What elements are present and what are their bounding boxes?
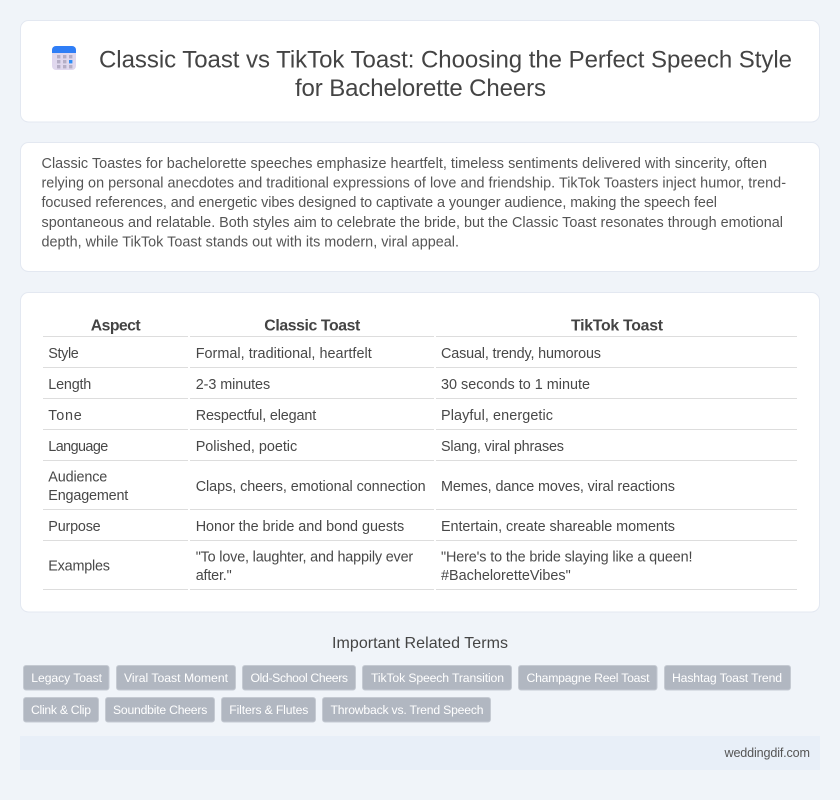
tag xyxy=(242,666,356,690)
row: audience engagement: Claps, cheers, emotional connection xyxy=(196,479,426,495)
tag: Legacy Toast xyxy=(31,671,103,685)
tag: Filters & Flutes xyxy=(229,703,308,717)
row: examples xyxy=(48,550,693,584)
row: examples: #BacheloretteVibes" xyxy=(441,568,571,584)
tag: Clink & Clip xyxy=(31,703,91,717)
header panel xyxy=(20,20,820,122)
title: Classic Toast vs TikTok Toast: Choosing the Perfect Speech Style xyxy=(99,46,792,74)
row: length: 2-3 minutes xyxy=(196,377,270,393)
tag xyxy=(222,698,316,722)
tag xyxy=(116,666,236,690)
row: style: Casual, trendy, humorous xyxy=(441,346,601,362)
tag: Viral Toast Moment xyxy=(124,671,229,685)
row: language: Language xyxy=(48,439,108,455)
panel: description xyxy=(20,142,820,272)
row: examples: "To love, laughter, and happily ever xyxy=(196,550,413,566)
row: purpose xyxy=(48,519,675,535)
tag: Soundbite Cheers xyxy=(113,703,207,717)
tag xyxy=(24,698,98,722)
table header: Classic Toast xyxy=(264,318,361,335)
tag xyxy=(322,698,490,722)
description text: depth, while TikTok Toast stands out with its modern, viral appeal. xyxy=(42,234,459,250)
description text: relying on personal anecdotes and traditional expressions of love and friendship. TikTok Toasters inject humor, trend- xyxy=(42,176,786,192)
description text: focused references, and energetic vibes designed to captivate a younger audience, making the speech feel xyxy=(42,195,717,211)
row: audience engagement: Audience xyxy=(48,470,107,486)
tag xyxy=(664,666,790,690)
tag: Hashtag Toast Trend xyxy=(672,671,782,685)
row: purpose: Entertain, create shareable moments xyxy=(441,519,675,535)
row: tone: Playful, energetic xyxy=(441,408,553,424)
tag: TikTok Speech Transition xyxy=(371,671,504,685)
tags: related terms xyxy=(24,666,790,722)
row: language: Slang, viral phrases xyxy=(441,439,564,455)
row: length: Length xyxy=(48,377,91,393)
table rules xyxy=(43,336,797,590)
row: tone: Respectful, elegant xyxy=(196,408,316,424)
icon: calendar xyxy=(52,46,76,70)
row: purpose: Purpose xyxy=(48,519,101,535)
tag xyxy=(24,666,109,690)
row: tone: Tone xyxy=(48,408,82,424)
footer xyxy=(20,736,820,770)
table header: TikTok Toast xyxy=(571,318,664,335)
row: purpose: Honor the bride and bond guests xyxy=(196,519,404,535)
row: tone xyxy=(48,408,553,424)
title: for Bachelorette Cheers xyxy=(295,75,546,102)
row: language xyxy=(48,439,564,455)
row: length xyxy=(48,377,590,393)
row: examples: "Here's to the bride slaying like a queen! xyxy=(441,550,692,566)
panel: comparison table xyxy=(20,292,820,612)
row: examples: after." xyxy=(196,568,232,584)
row: audience engagement xyxy=(48,470,675,504)
footer: weddingdif.com xyxy=(724,746,810,760)
description text: spontaneous and relatable. Both styles aim to celebrate the bride, but the Classic Toast resonates through emotional xyxy=(42,215,783,231)
row: length: 30 seconds to 1 minute xyxy=(441,377,590,393)
tag: Old-School Cheers xyxy=(250,671,348,685)
row: audience engagement: Engagement xyxy=(48,488,128,504)
row: audience engagement: Memes, dance moves, viral reactions xyxy=(441,479,675,495)
row: examples: Examples xyxy=(48,559,110,575)
tag: Throwback vs. Trend Speech xyxy=(330,703,484,717)
description text xyxy=(42,156,786,250)
row: style: Formal, traditional, heartfelt xyxy=(196,346,372,362)
row: style xyxy=(48,346,601,362)
heading: related terms: Important Related Terms xyxy=(332,635,508,652)
tag xyxy=(362,666,512,690)
title xyxy=(99,46,792,102)
row: language: Polished, poetic xyxy=(196,439,297,455)
tag xyxy=(106,698,214,722)
tag: Champagne Reel Toast xyxy=(526,671,650,685)
description text: Classic Toastes for bachelorette speeches emphasize heartfelt, timeless sentiments delivered with sincerity, often xyxy=(42,156,767,172)
tag xyxy=(518,666,657,690)
table header: Aspect xyxy=(91,318,141,335)
table header xyxy=(91,318,664,335)
row: style: Style xyxy=(48,346,79,362)
